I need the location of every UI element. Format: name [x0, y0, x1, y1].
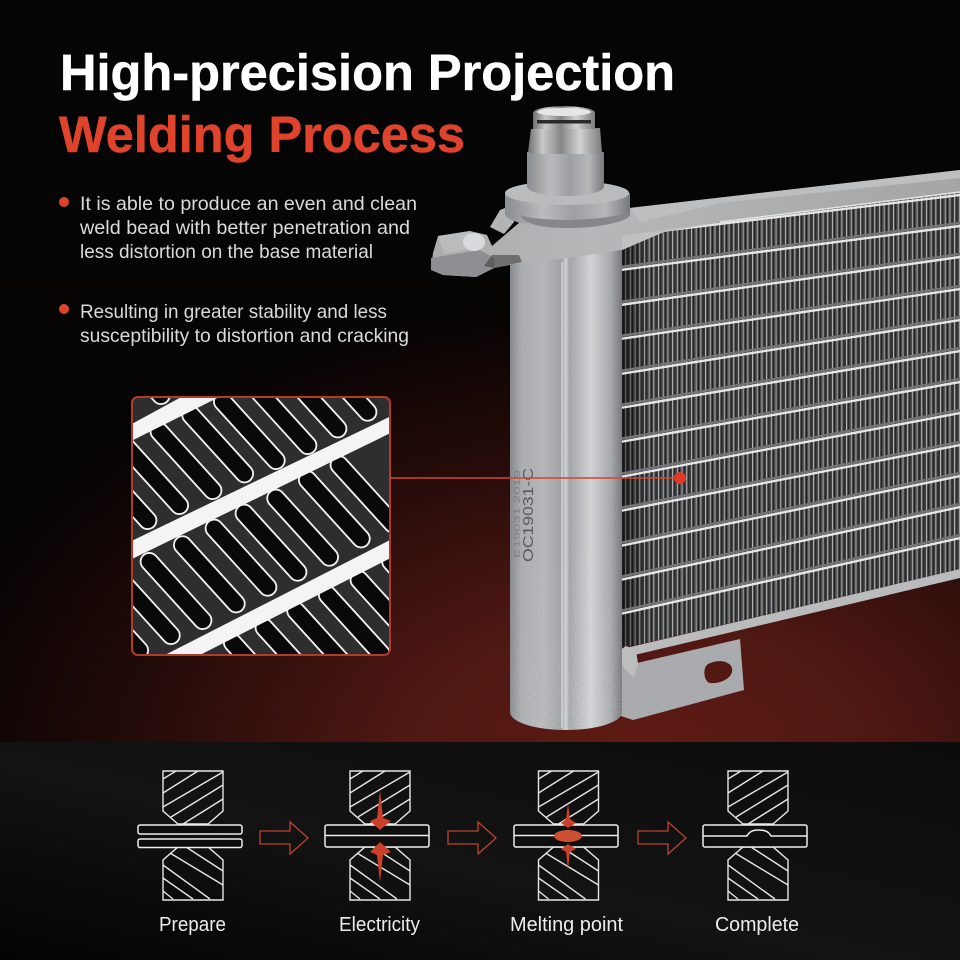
- bullet: stability: [59, 301, 409, 347]
- arrow 2: [448, 822, 496, 854]
- disc collar: [505, 181, 630, 228]
- neck: [527, 152, 604, 196]
- magnified tube rails: [130, 395, 393, 657]
- callout line and dot: [390, 472, 686, 484]
- title: High-precision Projection: [60, 44, 675, 101]
- bullet: weld bead: less distortion on the base material: [80, 241, 373, 263]
- engraved part number: E19031 2019: [513, 469, 522, 558]
- lower bracket: [617, 569, 960, 720]
- bullet: stability: Resulting in greater stability and less: [80, 301, 387, 323]
- step 3: melting point: Melting point: [510, 914, 623, 936]
- manifold cylinder: [510, 240, 622, 732]
- hex nut: [528, 128, 602, 154]
- bullet: weld bead: weld bead with better penetration and: [79, 217, 410, 239]
- bullet: weld bead: It is able to produce an even and clean: [80, 193, 417, 215]
- radiator fin core: [620, 188, 960, 649]
- step 3: melting point: [510, 771, 623, 936]
- step 4: complete: Complete: [715, 914, 799, 936]
- step 1: prepare: [138, 771, 242, 936]
- engraved part number: OC19031-C: [520, 468, 537, 562]
- engraved part number: [513, 468, 537, 562]
- detail inset: magnified fins: [131, 396, 391, 656]
- top fitting: [533, 106, 595, 129]
- magnified fin loops: [63, 337, 444, 701]
- radiator photo: [431, 106, 960, 732]
- title: [59, 44, 675, 163]
- step 2: electricity: Electricity: [339, 914, 420, 936]
- step 2: electricity: [325, 771, 429, 936]
- step 4: complete: [703, 771, 807, 936]
- bullet: weld bead: [59, 193, 417, 263]
- step 1: prepare: Prepare: [159, 914, 226, 936]
- title accent line: Welding Process: [59, 106, 465, 163]
- arrow 3: [638, 822, 686, 854]
- mounting plate and tab: [431, 170, 960, 277]
- bullet: stability: susceptibility to distortion and cracking: [80, 325, 409, 347]
- arrow 1: [260, 822, 308, 854]
- process band: [0, 742, 960, 960]
